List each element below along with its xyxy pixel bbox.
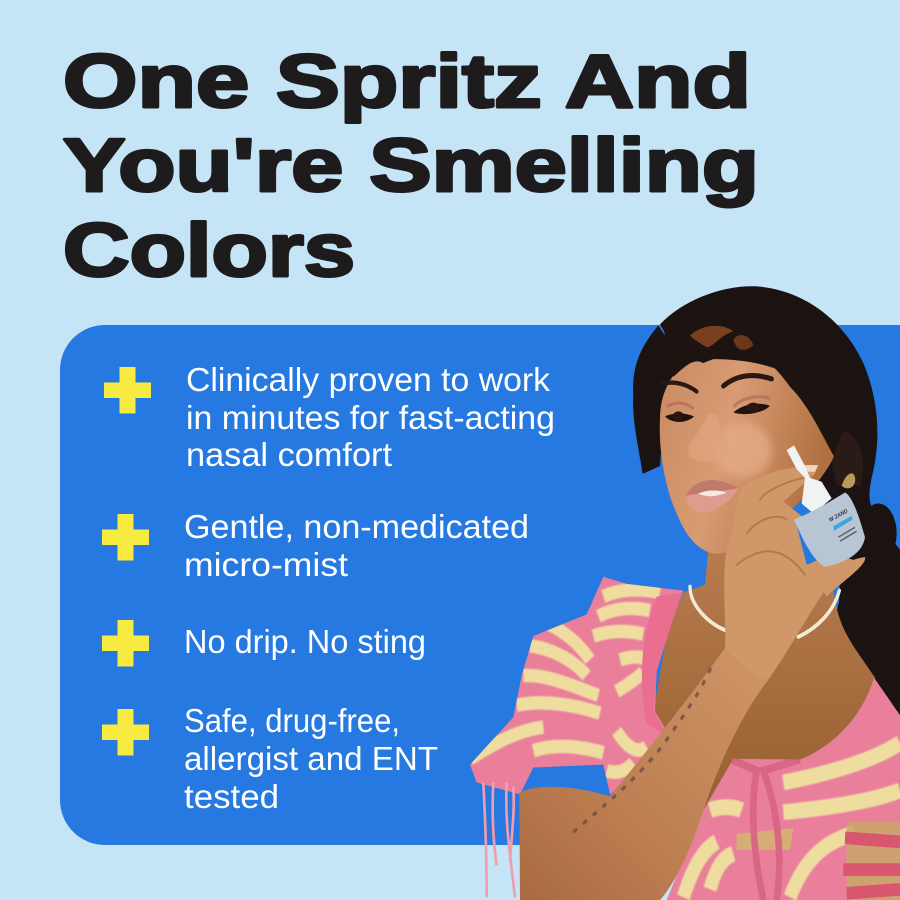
benefit 4 text: Safe, drug-free,	[184, 702, 400, 739]
benefit 1 text: in minutes for fast-acting	[186, 399, 555, 436]
earring	[842, 473, 855, 488]
face	[660, 359, 835, 554]
benefit 1 text: Clinically proven to work	[186, 361, 550, 398]
title	[63, 39, 759, 292]
benefit 1 text	[186, 361, 555, 473]
top: sleeve knit	[470, 573, 687, 798]
icon: yellow plus 1	[104, 367, 151, 414]
eyebrows	[663, 376, 772, 392]
title: You're Smelling	[63, 123, 759, 207]
forearm	[519, 648, 770, 900]
benefit 1	[104, 361, 555, 473]
icon: yellow plus 4	[102, 709, 149, 756]
top: lower body knit	[667, 676, 900, 900]
hand and fingers	[724, 465, 862, 678]
benefit 4	[102, 702, 438, 815]
benefit 1 text: nasal comfort	[186, 436, 392, 473]
sleeve fringe	[483, 782, 515, 897]
icon: yellow plus 3	[102, 620, 149, 666]
fringe hair	[663, 307, 863, 486]
hair back and braid	[633, 286, 900, 717]
necklace	[690, 587, 839, 637]
bottle label: W ZAND	[828, 508, 849, 524]
benefit 2	[102, 508, 529, 583]
spray bottle	[787, 445, 865, 567]
benefit 4 text: tested	[184, 778, 279, 815]
benefit 3 text: No drip. No sting	[184, 623, 426, 660]
benefit 2 text: micro-mist	[184, 546, 348, 583]
lips	[686, 480, 738, 512]
benefit 4 text: allergist and ENT	[184, 740, 438, 777]
hand overlap: thumb	[817, 557, 865, 597]
photo: woman holding nasal spray	[470, 286, 900, 900]
benefit 2 text	[184, 508, 529, 583]
benefit list	[102, 361, 555, 815]
title: One Spritz And	[63, 39, 751, 123]
panel: benefits background	[60, 325, 900, 845]
arm tattoo	[573, 662, 713, 832]
cheek highlight	[715, 422, 772, 478]
icon: yellow plus 2	[102, 514, 149, 560]
eyes	[665, 397, 770, 422]
benefit 4 text	[184, 702, 438, 815]
nose	[688, 415, 729, 462]
benefit 2 text: Gentle, non-medicated	[184, 508, 529, 545]
chest and neck	[653, 541, 875, 812]
title: Colors	[63, 208, 355, 292]
benefit 3	[102, 620, 426, 666]
